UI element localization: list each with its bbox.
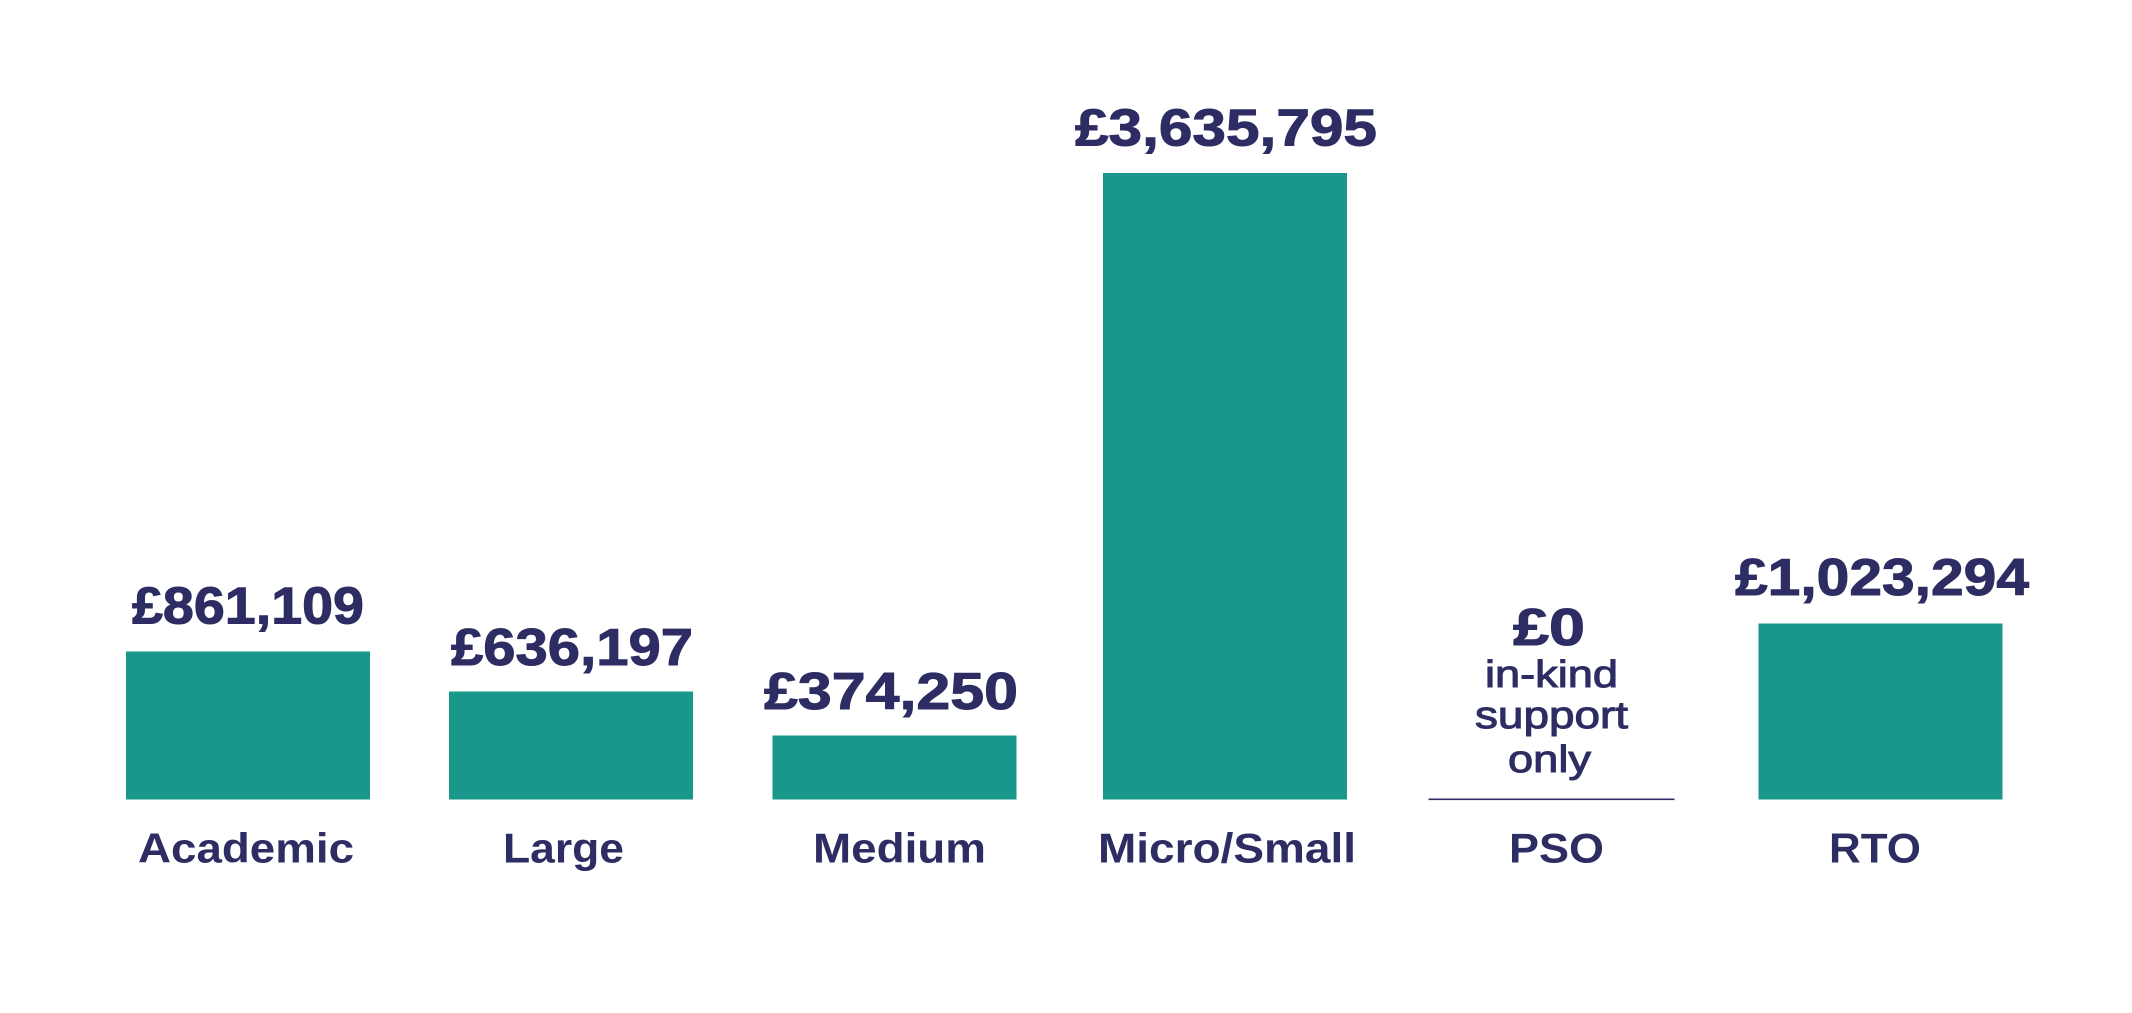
label: RTO: RTO [1829,824,1921,872]
bar: Academic [126,652,370,800]
column: Large [449,619,693,872]
bar: Large [449,692,693,800]
bar: Micro/Small [1103,173,1347,800]
value: RTO: £1,023,294 [1735,549,2029,607]
baseline: PSO zero bar [1428,798,1674,800]
column: Medium [764,663,1018,872]
label: Academic: Academic [138,824,354,872]
column: PSO [1428,599,1674,872]
label: Medium: Medium [813,824,986,872]
value: Large: £636,197 [451,619,693,677]
bar: Medium [772,736,1016,800]
value: Medium: £374,250 [764,663,1018,721]
column: RTO [1735,549,2029,872]
value: PSO: £0 [1513,599,1585,657]
note: in-kind support only: only [1508,739,1591,781]
bar: RTO [1758,624,2002,800]
note: in-kind support only: in-kind [1485,654,1618,696]
label: Large: Large [503,824,624,872]
column: Micro/Small [1075,100,1377,872]
note: in-kind support only: support [1475,695,1629,737]
label: Micro/Small: Micro/Small [1098,824,1356,872]
label: PSO: PSO [1509,824,1604,872]
column: Academic [126,578,370,872]
value: Micro/Small: £3,635,795 [1075,100,1377,158]
value: Academic: £861,109 [132,578,364,636]
note: in-kind support only [1475,654,1629,781]
